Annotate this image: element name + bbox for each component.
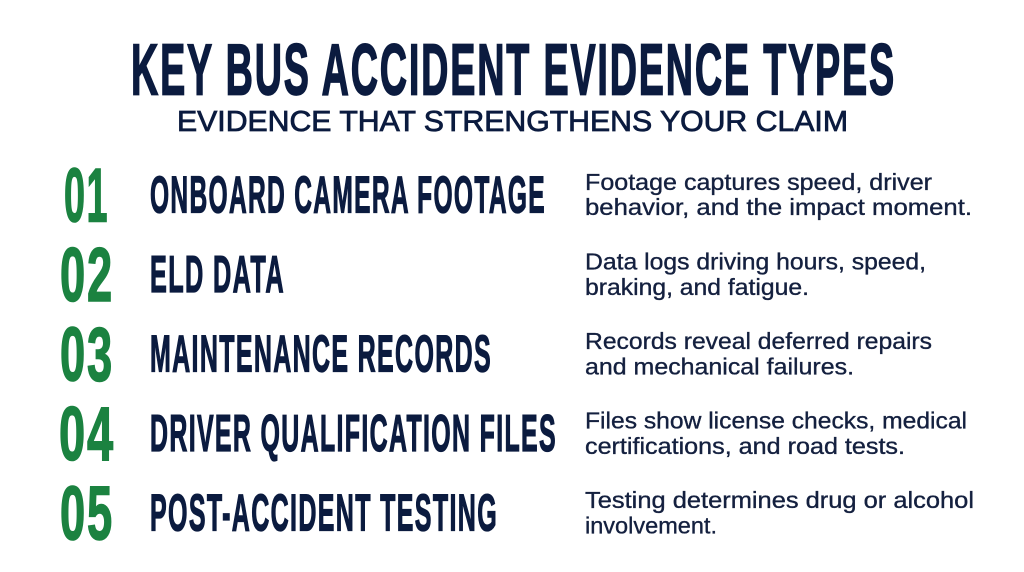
row 1: onboard camera footage: [64, 154, 972, 238]
description: footage: [585, 169, 972, 220]
description: testing: [585, 487, 974, 538]
number 04: 04: [59, 392, 115, 477]
row 2: eld data: [60, 233, 926, 318]
number 05: 05: [60, 472, 114, 556]
description: testing: involvement.: [585, 512, 717, 538]
description: footage: behavior, and the impact moment.: [585, 194, 972, 220]
description: maintenance: Records reveal deferred repairs: [585, 328, 932, 354]
row 5: post-accident testing: POST-ACCIDENT TESTING: [150, 484, 498, 542]
row 1: onboard camera footage: ONBOARD CAMERA FOOTAGE: [150, 166, 546, 224]
description: eld: braking, and fatigue.: [585, 274, 809, 300]
row 4: driver qualification files: [59, 392, 967, 477]
description: eld: [585, 248, 926, 300]
row 5: post-accident testing: [60, 472, 974, 556]
row 4: driver qualification files: DRIVER QUALIFICATION FILES: [150, 405, 557, 463]
row 3: maintenance records: MAINTENANCE RECORDS: [150, 326, 492, 384]
description: eld: Data logs driving hours, speed,: [585, 248, 926, 274]
row 2: eld data: ELD DATA: [150, 246, 285, 304]
description: driver files: certifications, and road tests.: [585, 433, 905, 459]
row 3: maintenance records: [60, 312, 932, 398]
description: maintenance: and mechanical failures.: [585, 354, 854, 380]
description: footage: Footage captures speed, driver: [585, 169, 932, 195]
number 02: 02: [60, 233, 114, 318]
description: driver files: [585, 408, 967, 459]
description: maintenance: [585, 328, 932, 380]
number 03: 03: [60, 312, 114, 398]
description: testing: Testing determines drug or alcohol: [585, 487, 974, 513]
row 1: onboard camera footage: 01: [64, 154, 109, 238]
subtitle: EVIDENCE THAT STRENGTHENS YOUR CLAIM: [177, 106, 848, 138]
description: driver files: Files show license checks, medical: [585, 408, 967, 434]
